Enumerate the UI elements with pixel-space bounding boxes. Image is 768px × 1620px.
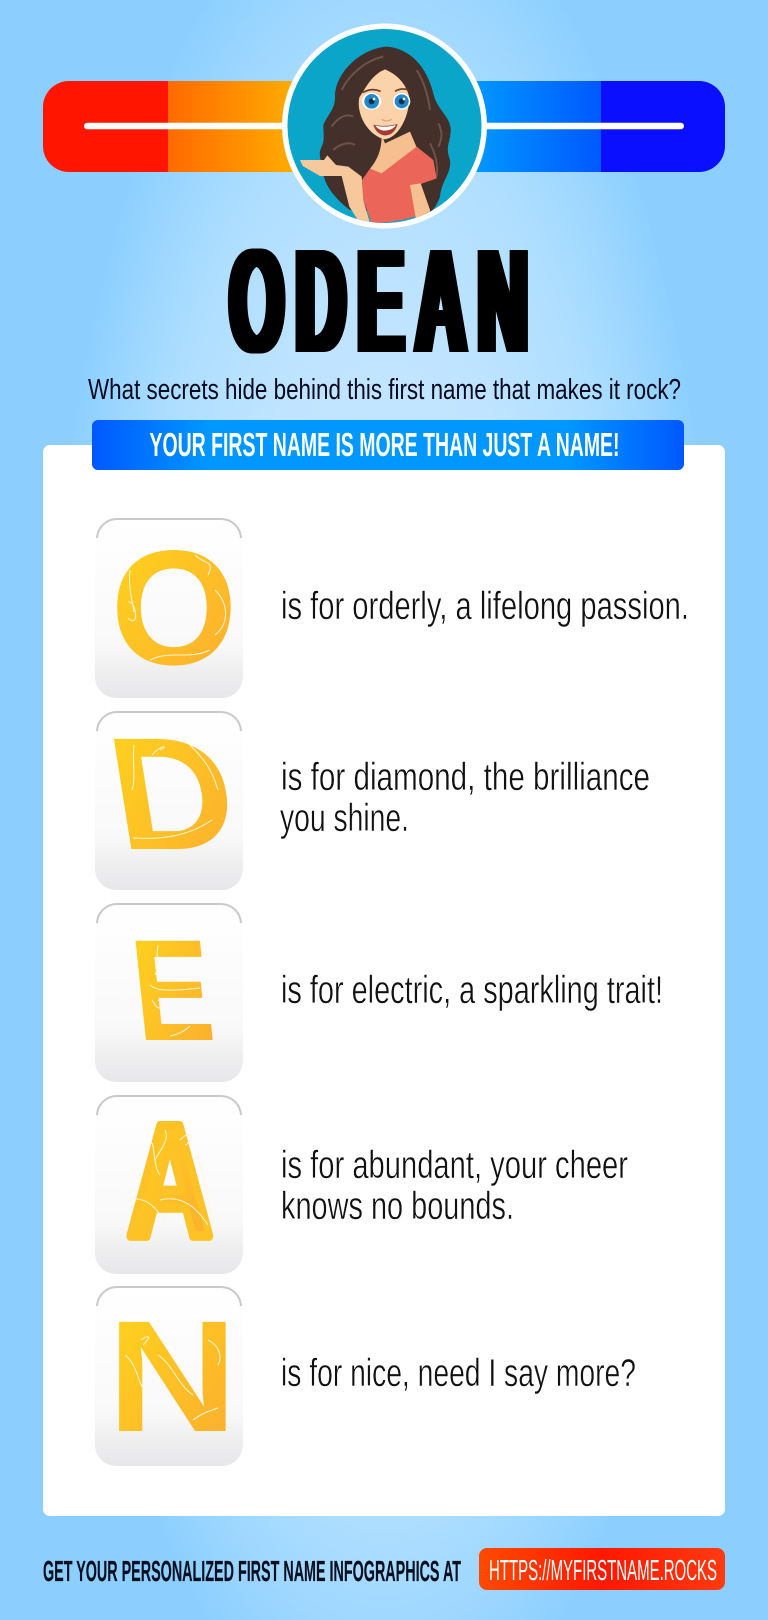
- banner: tagline: [92, 420, 684, 470]
- row: letter E: [95, 904, 663, 1082]
- tile: letter A: A: [127, 1091, 213, 1270]
- row: letter O: [95, 516, 689, 699]
- title: ODEAN: [225, 219, 535, 384]
- tile: letter E: E: [124, 911, 221, 1072]
- header colour bar: [43, 81, 725, 172]
- row: letter N: [95, 1287, 636, 1466]
- tile: letter N: N: [107, 1289, 238, 1465]
- tile: letter A: [95, 1091, 243, 1274]
- text: D lines: is for diamond, the brilliance: [281, 756, 650, 799]
- avatar: woman in circle: [282, 24, 487, 228]
- text: D lines: you shine.: [280, 797, 409, 840]
- row: letter D: [95, 705, 650, 890]
- text: A lines: [281, 1144, 628, 1228]
- text: N line: is for nice, need I say more?: [281, 1352, 636, 1395]
- tile: letter O: O: [110, 516, 237, 699]
- panel: white content card: [43, 445, 725, 1516]
- tile: letter E: [95, 904, 243, 1082]
- row: letter A: [95, 1091, 628, 1274]
- text: A lines: knows no bounds.: [281, 1185, 514, 1228]
- footer url button: [479, 1548, 725, 1590]
- text: A lines: is for abundant, your cheer: [281, 1144, 628, 1187]
- tile: letter D: D: [97, 705, 248, 884]
- text: D lines: [280, 756, 650, 840]
